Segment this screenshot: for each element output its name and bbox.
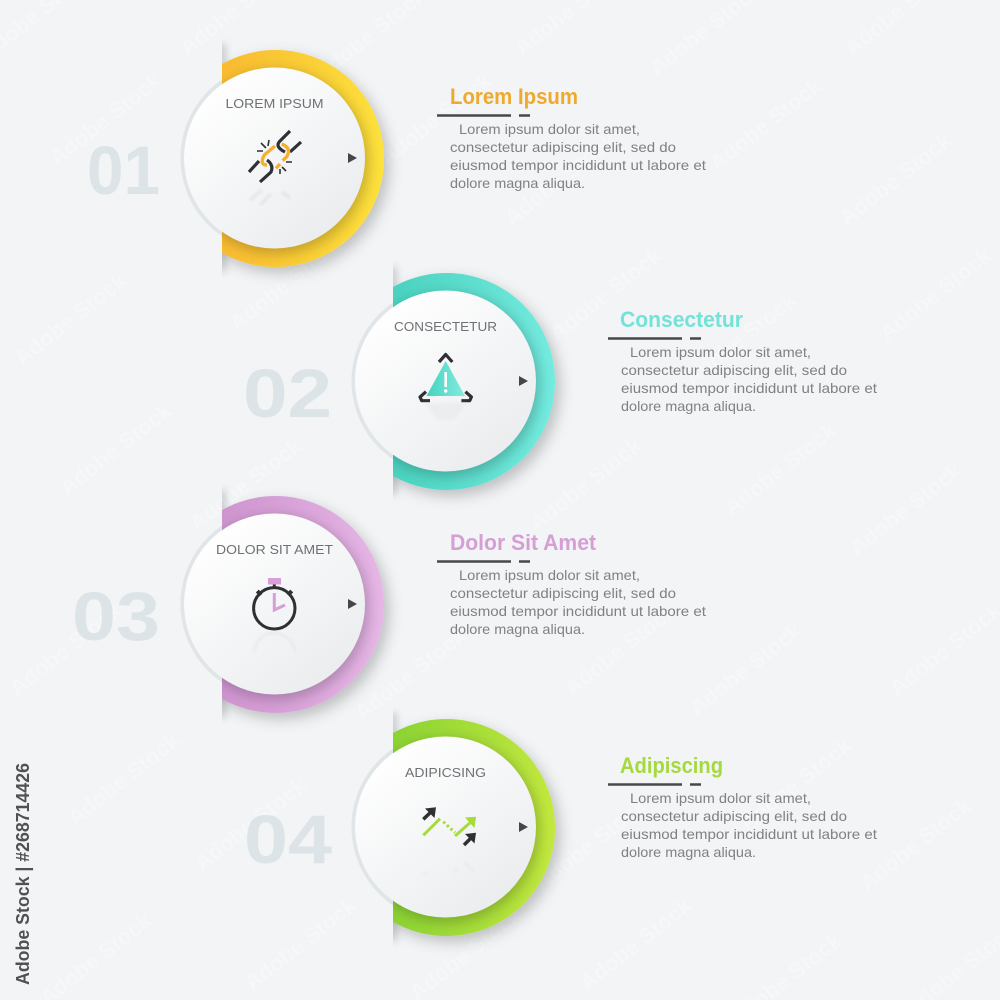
watermark: Adobe Stock <box>10 267 132 370</box>
panel: step 04 <box>244 713 877 941</box>
grey rim <box>352 302 393 460</box>
watermark: Adobe Stock <box>720 417 842 520</box>
white disc <box>184 68 365 248</box>
watermark: Adobe Stock <box>875 242 997 345</box>
description: eiusmod tempor incididunt ut labore et <box>621 826 877 842</box>
number 04: 04 <box>244 801 332 878</box>
coloured disc <box>393 272 567 503</box>
watermark: Adobe Stock <box>545 242 667 345</box>
watermark: Adobe Stock <box>530 792 652 895</box>
watermark: Adobe Stock <box>185 432 307 535</box>
coloured disc <box>393 718 567 949</box>
panel: step 01 <box>87 44 706 272</box>
description: dolore magna aliqua. <box>450 621 585 637</box>
description: dolore magna aliqua. <box>621 844 756 860</box>
icon: warning triangle <box>420 354 471 420</box>
arrow <box>519 376 528 386</box>
watermark: Adobe Stock <box>190 772 312 875</box>
stock id side text: Adobe Stock | #268714426 <box>13 763 33 985</box>
arrow <box>348 599 357 609</box>
watermark: Adobe Stock <box>575 892 697 995</box>
icon: stopwatch <box>254 578 296 652</box>
panel edge shadow <box>219 490 225 718</box>
grey rim <box>180 526 222 682</box>
icon: broken chain <box>249 131 301 205</box>
grey rim <box>180 80 222 236</box>
disc shadow on ring <box>222 511 374 705</box>
description: eiusmod tempor incididunt ut labore et <box>450 603 706 619</box>
panel: step 02 <box>243 267 877 495</box>
watermark: Adobe Stock <box>5 597 127 700</box>
coloured disc <box>222 495 396 726</box>
watermark: Adobe Stock <box>500 127 622 230</box>
white disc <box>355 290 536 472</box>
description <box>450 567 706 637</box>
description: Lorem ipsum dolor sit amet, <box>630 790 811 806</box>
watermark: Adobe Stock <box>45 67 167 170</box>
disc shadow on ring <box>393 288 546 482</box>
heading: Dolor Sit Amet <box>450 530 597 555</box>
watermark: Adobe Stock <box>560 597 682 700</box>
watermark: Adobe Stock <box>350 622 472 725</box>
watermark: Adobe Stock <box>225 232 347 335</box>
description: Lorem ipsum dolor sit amet, <box>459 567 640 583</box>
watermark: Adobe Stock <box>835 127 957 230</box>
watermark: Adobe Stock <box>845 457 967 560</box>
divider bars <box>437 560 530 563</box>
white disc <box>355 736 536 918</box>
watermark: Adobe Stock <box>685 617 807 720</box>
arrow <box>348 153 357 163</box>
disc label: CONSECTETUR <box>394 319 497 334</box>
description: consectetur adipiscing elit, sed do <box>450 139 676 155</box>
description: consectetur adipiscing elit, sed do <box>450 585 676 601</box>
description <box>621 344 877 414</box>
panel: step 03 <box>72 490 706 718</box>
divider bars <box>608 337 701 340</box>
watermark: Adobe Stock <box>705 72 827 175</box>
panel edge shadow <box>219 44 225 272</box>
description: dolore magna aliqua. <box>621 398 756 414</box>
watermark: Adobe Stock <box>375 67 497 170</box>
description: eiusmod tempor incididunt ut labore et <box>621 380 877 396</box>
watermark: Adobe Stock <box>855 792 977 895</box>
description <box>450 121 706 191</box>
description: eiusmod tempor incididunt ut labore et <box>450 157 706 173</box>
white disc <box>184 514 365 694</box>
number 02: 02 <box>243 355 332 432</box>
icon: zigzag arrows <box>423 807 476 876</box>
number 01: 01 <box>87 132 160 209</box>
description: consectetur adipiscing elit, sed do <box>621 808 847 824</box>
heading: Consectetur <box>620 307 743 332</box>
coloured disc <box>222 49 396 280</box>
arrow <box>519 822 528 832</box>
watermark: Adobe Stock <box>55 397 177 500</box>
divider bars <box>608 783 701 786</box>
description <box>621 790 877 860</box>
watermark: Adobe Stock <box>525 432 647 535</box>
disc label: DOLOR SIT AMET <box>216 542 333 557</box>
divider bars <box>437 114 530 117</box>
watermark: Adobe Stock <box>63 727 185 830</box>
watermark: Adobe Stock <box>240 892 362 995</box>
heading: Lorem Ipsum <box>450 84 578 109</box>
disc shadow on ring <box>393 734 546 928</box>
panel edge shadow <box>390 267 396 495</box>
watermark: Adobe Stock <box>680 287 802 390</box>
number 03: 03 <box>72 578 160 655</box>
heading: Adipiscing <box>620 753 723 778</box>
grey rim <box>352 748 393 906</box>
panel edge shadow <box>390 713 396 941</box>
watermark: Adobe Stock <box>735 732 857 835</box>
description: dolore magna aliqua. <box>450 175 585 191</box>
description: consectetur adipiscing elit, sed do <box>621 362 847 378</box>
disc label: LOREM IPSUM <box>226 96 324 111</box>
disc label: ADIPICSING <box>405 765 486 780</box>
disc shadow on ring <box>222 64 374 260</box>
description: Lorem ipsum dolor sit amet, <box>459 121 640 137</box>
description: Lorem ipsum dolor sit amet, <box>630 344 811 360</box>
